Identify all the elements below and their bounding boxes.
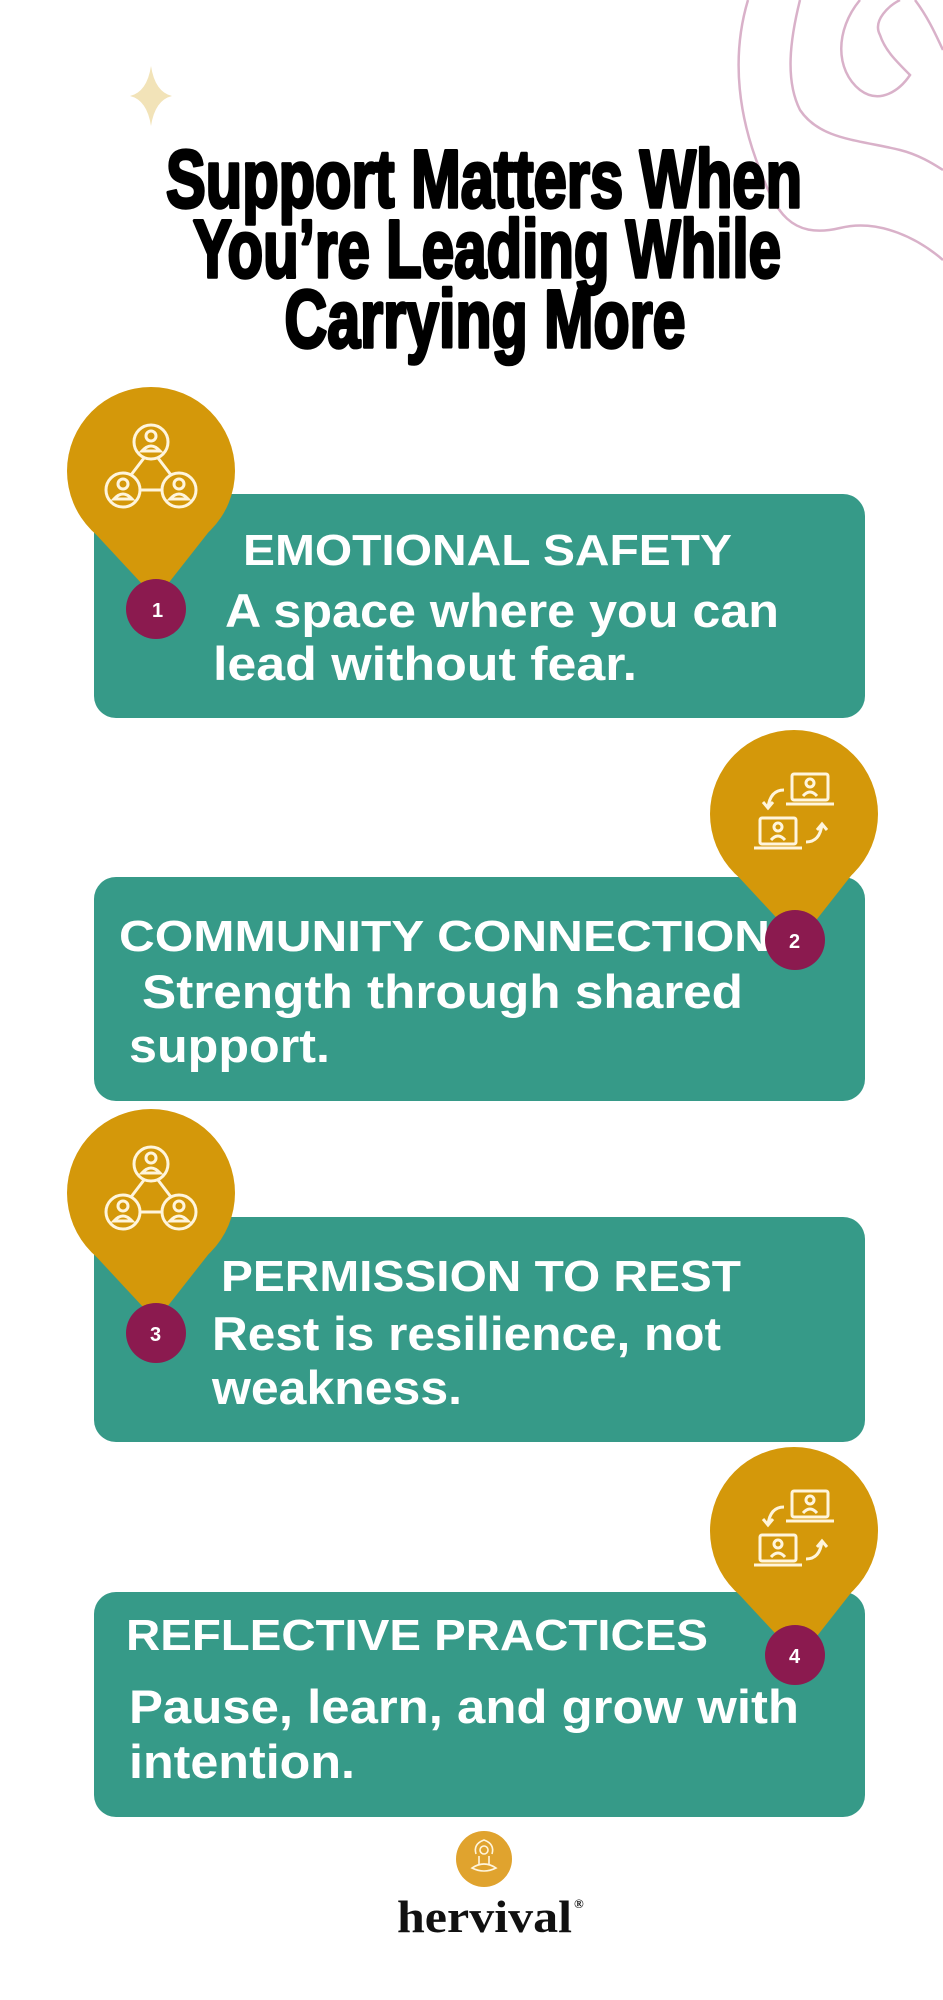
pin 1: 1: [152, 600, 163, 622]
pin 3: [67, 1109, 235, 1363]
pin 2: 2: [789, 931, 800, 953]
panel: permission to rest: weakness.: [211, 1361, 462, 1414]
panel: reflective practices: Pause, learn, and grow with: [129, 1680, 799, 1733]
icon: sparkle star: [130, 66, 172, 126]
panel: emotional safety: lead without fear.: [213, 637, 637, 690]
pin 4: [710, 1447, 878, 1685]
panel: community connection: COMMUNITY CONNECTION: [119, 912, 770, 961]
pin 4: 4: [789, 1646, 801, 1668]
panel: emotional safety: [94, 494, 865, 718]
panel: reflective practices: [94, 1592, 865, 1817]
title: Carrying More: [284, 274, 686, 365]
pin 2: [710, 730, 878, 970]
panel: permission to rest: PERMISSION TO REST: [221, 1252, 741, 1301]
panel: permission to rest: Rest is resilience, not: [212, 1307, 721, 1360]
panel: emotional safety: EMOTIONAL SAFETY: [243, 526, 732, 575]
logo: hervival: hervival: [397, 1891, 572, 1942]
panel: community connection: Strength through shared: [142, 965, 743, 1018]
title: [166, 134, 802, 365]
pin 1: [67, 387, 235, 639]
panel: community connection: [94, 877, 865, 1101]
logo: hervival: ®: [574, 1896, 584, 1911]
panel: reflective practices: intention.: [129, 1735, 355, 1788]
logo: hervival: [397, 1831, 584, 1942]
panel: reflective practices: REFLECTIVE PRACTICES: [126, 1611, 708, 1660]
panel: emotional safety: A space where you can: [225, 584, 779, 637]
panel: permission to rest: [94, 1217, 865, 1442]
decoration: contour lines: [739, 0, 943, 260]
pin 3: 3: [150, 1324, 161, 1346]
panel: community connection: support.: [129, 1019, 330, 1072]
